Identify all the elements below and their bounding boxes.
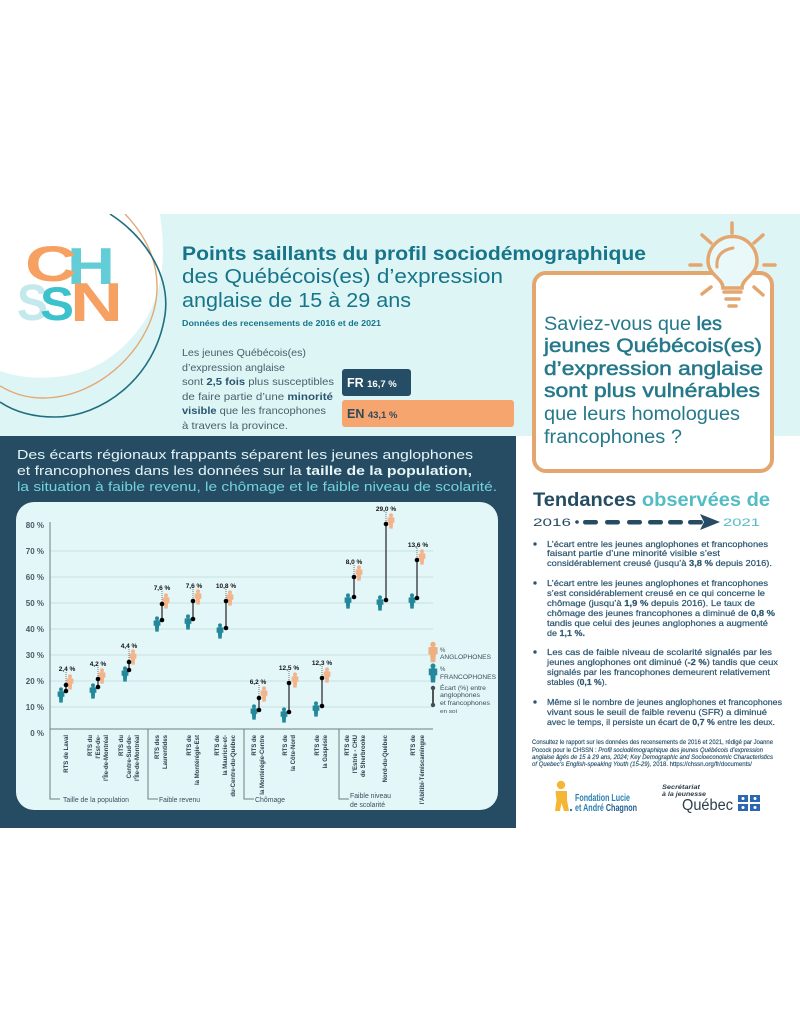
logo: CHSSN: S — [40, 277, 74, 330]
text block: callout question: francophones ? — [544, 427, 682, 448]
text block: callout question: Saviez-vous que les — [544, 314, 722, 335]
data: Nord-du-Québec — [376, 506, 396, 611]
x axis region labels: la Gaspésie — [323, 734, 329, 768]
heading: regional gaps: et francophones dans les données sur la taille de la population, — [17, 463, 472, 478]
legend: en soi — [440, 709, 457, 715]
x axis region labels: l’Île-de-Montréal — [102, 735, 110, 781]
logo: Secrétariat à la jeunesse Québec: à la jeunesse — [662, 791, 706, 798]
y axis labels: 0 % — [30, 729, 44, 738]
logo: Secrétariat à la jeunesse Québec — [662, 784, 760, 814]
text block: callout question: jeunes Québécois(es) — [543, 336, 762, 357]
heading: trends: Tendances observées de — [533, 489, 770, 511]
logo: Fondation Lucie et André Chagnon: et André Chagnon — [575, 803, 637, 814]
data: Nord-du-Québec: 29,0 % — [376, 506, 396, 513]
data: RTS de la Montérégie-Est: 7,6 % — [186, 583, 203, 590]
text block: trend 4: Même si le nombre de jeunes anglophones et francophones — [547, 697, 782, 707]
data: RTS de la Côte-Nord — [279, 665, 299, 723]
subtitle: census data: Données des recensements de 2016 et de 2021 — [182, 319, 382, 328]
text block: source reference: Pocock pour le CHSSN : Profil sociodémographique des jeunes Québécois d’expression — [532, 747, 763, 754]
data: RTS de l'Est-de-l'Île-de-Montréal: 4,2 % — [90, 661, 107, 668]
data: RTS de Laval — [58, 666, 76, 703]
legend: Écart (%) entre — [440, 685, 487, 692]
text block: trend 2: chômage (jusqu’à 1,9 % depuis 2016). Le taux de — [547, 598, 755, 608]
panel: regional gaps — [0, 436, 516, 828]
bar: FR 16,7 % — [342, 369, 411, 396]
bar: FR 16,7 %: FR 16,7 % — [347, 376, 397, 390]
x axis region labels: du-Centre-du-Québec — [231, 734, 237, 797]
text block: source reference: Consultez le rapport sur les données des recensements de 2016 et 2021, rédigé par Joanne — [532, 739, 773, 746]
text block: trend 2: chômage des jeunes francophones a diminué de 0,8 % — [547, 608, 775, 618]
logo: Secrétariat à la jeunesse Québec: Québec — [682, 797, 733, 814]
bar: EN 43,1 % — [342, 400, 514, 427]
legend: FRANCOPHONES — [440, 675, 496, 681]
x axis region labels: RTS de — [411, 734, 417, 756]
logo: Secrétariat à la jeunesse Québec: Secrétariat — [662, 784, 701, 791]
text block: trend 3: jeunes anglophones ont diminué ( -2 %) tandis que ceux — [546, 657, 779, 667]
x axis region labels: RTS de — [315, 734, 321, 756]
data: RTS de l'Estrie: 8,0 % — [346, 559, 363, 566]
legend — [428, 642, 496, 715]
heading: regional gaps: Des écarts régionaux frappants séparent les jeunes anglophones — [17, 447, 474, 462]
arrow: 2016 to 2021 — [533, 514, 760, 530]
arrow: 2016 to 2021: 2016 — [533, 517, 571, 529]
data: RTS du Centre-Sud: 4,4 % — [121, 643, 138, 650]
x axis region labels: RTS de — [345, 734, 351, 756]
bar: EN 43,1 %: EN 43,1 % — [347, 407, 398, 421]
category labels: Faible revenu — [159, 797, 200, 804]
text block: visible minority statement: visible que les francophones — [182, 405, 326, 417]
text block: trend 2: tandis que celui des jeunes anglophones a augmenté — [547, 618, 768, 628]
text block: trend 1: L’écart entre les jeunes anglophones et francophones — [547, 539, 768, 549]
data: RTS de l'Est-de-l'Île-de-Montréal — [90, 661, 107, 699]
text block: trend 2 — [533, 578, 775, 638]
chart: gaps by region — [16, 502, 498, 810]
data: RTS de l'Abitibi-Témiscamingue — [408, 542, 428, 609]
y axis labels: 10 % — [26, 703, 44, 712]
category labels: Chômage — [255, 797, 285, 804]
title: anglaise de 15 à 29 ans — [182, 290, 411, 312]
x axis region labels: la Côte-Nord — [291, 735, 297, 771]
text block: visible minority statement: Les jeunes Québécois(es) — [182, 347, 306, 359]
icon: light bulb — [690, 223, 775, 306]
x axis region labels: la Montérégie-Est — [195, 735, 201, 785]
text block: trend 3 — [533, 647, 779, 687]
panel: did you know callout — [534, 223, 775, 471]
text block: callout question: sont plus vulnérables — [544, 381, 760, 402]
text block: trend 3: signalés par les francophones demeurent relativement — [547, 667, 771, 677]
title: des Québécois(es) d’expression — [182, 266, 503, 288]
data: RTS de l'Abitibi-Témiscamingue: 13,6 % — [408, 542, 428, 549]
text block: visible minority statement: d’expression anglaise — [182, 362, 285, 374]
x axis region labels: l’Estrie - CHU — [353, 735, 359, 773]
logo: CHSSN — [17, 236, 123, 333]
x axis region labels: RTS de — [215, 734, 221, 756]
y axis labels: 20 % — [26, 677, 44, 686]
text block: trend 1: faisant partie d’une minorité visible s’est — [547, 548, 721, 558]
text block: trend 2: de 1,1 %. — [547, 628, 585, 638]
y axis labels: 30 % — [26, 651, 44, 660]
logo: CHSSN: S — [17, 274, 48, 331]
text block: visible minority statement — [182, 347, 334, 432]
data: RTS de l'Estrie — [345, 559, 363, 609]
data: RTS de la Montérégie-Centre: 6,2 % — [250, 679, 267, 686]
data: RTS de la Gaspésie — [312, 660, 332, 717]
data: RTS de la Côte-Nord: 12,5 % — [279, 665, 299, 672]
x axis region labels: de Sherbrooke — [361, 734, 367, 777]
icon: decorative logo arcs — [0, 214, 166, 417]
text block: visible minority statement: sont 2,5 fois plus susceptibles — [182, 376, 334, 388]
text block: trend 4 — [533, 697, 782, 727]
legend: ANGLOPHONES — [440, 655, 491, 661]
text block: trend 4: vivant sous le seuil de faible revenu (SFR) a diminué — [547, 707, 767, 717]
text block: trend 4: avec le temps, il persiste un écart de 0,7 % entre les deux. — [547, 717, 775, 727]
text block: visible minority statement: de faire partie d’une minorité — [182, 391, 333, 403]
data: RTS de la Gaspésie: 12,3 % — [312, 660, 332, 667]
x axis region labels: RTS des — [155, 734, 161, 759]
data: RTS du Centre-Sud — [121, 643, 138, 682]
legend: % — [440, 648, 446, 654]
text block: source reference: of Quebec’s English-speaking Youth (15-29), 2018. https://chssn.org/fr/documents/ — [532, 761, 752, 768]
x axis region labels: RTS du — [119, 735, 125, 756]
text block: source reference: anglaise âgés de 15 à 29 ans, 2024; Key Demographic and Socioeconomic Characteristics — [532, 754, 774, 761]
logo: CHSSN: C — [25, 236, 77, 292]
x axis region labels: Nord-du-Québec — [383, 734, 389, 782]
y axis labels: 60 % — [26, 573, 44, 582]
legend: anglophones — [440, 693, 480, 699]
data: RTS de Laval: 2,4 % — [59, 666, 76, 673]
y axis labels: 40 % — [26, 625, 44, 634]
category labels — [63, 793, 391, 809]
text block: callout question: que leurs homologues — [544, 404, 740, 425]
text block: trend 1: considérablement creusé (jusqu’à 3,8 % depuis 2016). — [547, 558, 772, 568]
data: RTS de la Mauricie — [216, 583, 236, 639]
category labels: Faible niveau — [350, 793, 391, 800]
category labels: de scolarité — [350, 802, 385, 809]
x axis region labels: l’Abitibi-Témiscamingue — [420, 734, 426, 804]
logo: CHSSN: N — [70, 271, 123, 333]
y axis labels: 50 % — [26, 599, 44, 608]
x axis region labels: Centre-Sud-de- — [127, 735, 133, 778]
legend: % — [440, 667, 446, 673]
x axis region labels: RTS de — [252, 734, 258, 756]
x axis region labels: RTS de — [283, 734, 289, 756]
text block: source reference — [532, 739, 774, 768]
text block: trend 1 — [533, 539, 772, 568]
x axis region labels: Laurentides — [163, 734, 169, 769]
text block: trend 2: s’est considérablement creusé en ce qui concerne le — [547, 588, 765, 598]
data: RTS de la Mauricie: 10,8 % — [216, 583, 236, 590]
title: Points saillants du profil sociodémographique — [182, 243, 646, 265]
x axis region labels: la Montérégie-Centre — [260, 734, 266, 795]
x axis region labels: RTS de — [187, 734, 193, 756]
arrow: 2016 to 2021: 2021 — [723, 517, 760, 529]
text block: visible minority statement: à travers la province. — [182, 420, 288, 432]
text block: trend 3: stables (0,1 %). — [547, 677, 607, 687]
x axis region labels: l’Est-de- — [96, 735, 102, 759]
heading: regional gaps — [17, 447, 497, 494]
data: RTS de la Montérégie-Centre — [250, 679, 267, 720]
y axis labels: 70 % — [26, 547, 44, 556]
y axis labels — [26, 521, 44, 738]
text block: trend 3: Les cas de faible niveau de scolarité signalés par les — [547, 647, 772, 657]
logo: Fondation Lucie et André Chagnon: Fondation Lucie — [575, 793, 630, 804]
legend: et francophones — [440, 701, 490, 707]
data: RTS des Laurentides — [154, 585, 171, 632]
title — [182, 243, 646, 312]
x axis region labels: RTS du — [88, 735, 94, 756]
x axis region labels: l’Île-de-Montréal — [133, 735, 141, 781]
heading: regional gaps: la situation à faible revenu, le chômage et le faible niveau de scolarité. — [17, 479, 497, 494]
category labels: Taille de la population — [63, 797, 129, 804]
data: RTS de la Montérégie-Est — [185, 583, 203, 630]
text block: trend 2: L’écart entre les jeunes anglophones et francophones — [547, 578, 768, 588]
panel: mint header background — [0, 214, 800, 436]
x axis region labels: RTS de Laval — [64, 735, 70, 773]
x axis region labels: la Mauricie-et- — [223, 735, 229, 775]
text block: callout question — [543, 314, 763, 448]
text block: callout question: d’expression anglaise — [544, 359, 763, 380]
data: RTS des Laurentides: 7,6 % — [154, 585, 171, 592]
logo: CHSSN: H — [67, 238, 115, 296]
y axis labels: 80 % — [26, 521, 44, 530]
x axis region labels — [64, 734, 426, 804]
logo: Fondation Lucie et André Chagnon — [555, 781, 637, 814]
